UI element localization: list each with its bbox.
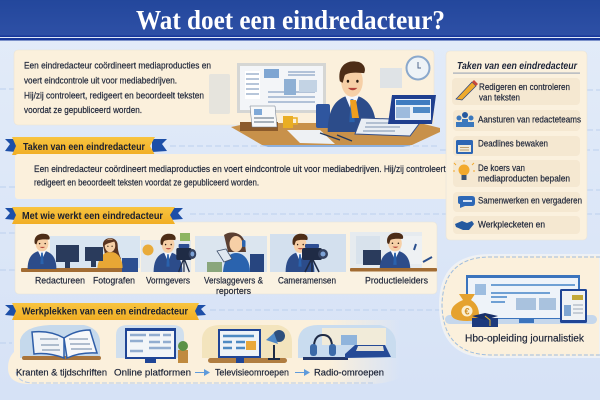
person xyxy=(316,104,330,128)
panel: intro xyxy=(14,50,434,125)
role: cameramensen xyxy=(278,234,336,286)
task: aansturen: Aansturen van redacteteams xyxy=(478,114,581,126)
desk xyxy=(231,123,440,145)
panel: met wie xyxy=(15,222,437,297)
panel: taken text xyxy=(15,154,455,199)
task: koers: De koers van xyxy=(478,163,525,174)
illustration backgrounds xyxy=(50,232,422,272)
workplace: kranten en tijdschriften xyxy=(16,325,107,378)
title: Wat doet een eindredacteur? xyxy=(136,4,445,35)
heading banner: Taken xyxy=(5,137,167,155)
arrow xyxy=(295,369,310,376)
role: cameramensen: Cameramensen xyxy=(278,276,336,286)
heading banner: met wie xyxy=(5,207,183,224)
workplace: radio-omroepen: Radio-omroepen xyxy=(314,368,384,378)
role: vormgevers xyxy=(142,233,196,286)
arrow xyxy=(195,369,210,376)
panel: taken sidebar xyxy=(446,51,587,240)
workplace: kranten en tijdschriften: Kranten & tijdschriften xyxy=(16,368,107,378)
task: samenwerken: Samenwerken en vergaderen xyxy=(478,196,582,206)
desk 1 xyxy=(21,268,128,272)
illustration: editor at desk xyxy=(209,56,440,147)
task: redigeren: van teksten xyxy=(479,92,520,104)
role: fotografen xyxy=(85,238,138,286)
icon: graduation cap xyxy=(472,313,498,327)
role: vormgevers: Vormgevers xyxy=(146,276,190,286)
task: samenwerken xyxy=(453,192,582,212)
role: verslaggevers en reporters: Verslaggevers & xyxy=(204,276,264,286)
workplace: radio-omroepen xyxy=(298,325,396,378)
task: koers: mediaproducten bepalen xyxy=(478,174,570,184)
sidebar heading: Taken van een eindredacteur xyxy=(457,61,578,72)
label: Hbo-opleiding journalistiek xyxy=(465,334,585,344)
task: werkplekken xyxy=(453,216,580,234)
heading banner: Taken: Taken van een eindredacteur xyxy=(23,141,145,153)
role: productieleiders: Productieleiders xyxy=(365,276,428,286)
heading banner: met wie: Met wie werkt een eindredacteur xyxy=(22,210,163,222)
panel: taken text: Een eindredacteur coördineert mediaproducties en voert eindcontrole uit voor mediabedrijven. Hij/zij controleert, xyxy=(34,164,448,175)
role: fotografen: Fotografen xyxy=(93,276,135,286)
heading banner: werkplekken xyxy=(5,303,206,320)
intro text: voert eindcontrole uit voor mediabedrijven. xyxy=(24,76,177,86)
heading banner: werkplekken: Werkplekken van een en eindredacteur xyxy=(22,306,188,318)
workplace: televisieomroepen xyxy=(202,325,292,378)
intro text: Een eindredacteur coördineert mediaproducties en xyxy=(24,60,211,72)
panel: taken text: redigeert en beoordeelt teksten voordat ze gepubliceerd worden. xyxy=(34,178,259,188)
title banner xyxy=(0,0,600,40)
intro text: voordat ze gepubliceerd worden. xyxy=(24,105,142,116)
intro text xyxy=(24,60,211,116)
task: deadlines xyxy=(453,136,580,156)
task: redigeren: Redigeren en controleren xyxy=(479,82,570,93)
role: productieleiders xyxy=(350,233,437,286)
role: redacteuren xyxy=(28,234,85,286)
task: deadlines: Deadlines bewaken xyxy=(478,138,548,150)
task: werkplekken: Werkplecketen en xyxy=(478,220,545,230)
panel: hbo opleiding xyxy=(440,255,600,357)
panel: werkplekken xyxy=(8,320,400,384)
intro text: Hij/zij controleert, redigeert en beoordeelt teksten xyxy=(24,90,204,102)
workplace: online platformen: Online platformen xyxy=(114,368,191,378)
task: koers xyxy=(453,160,580,187)
role: verslaggevers en reporters: reporters xyxy=(216,286,251,297)
workplace: televisieomroepen: Televisieomroepen xyxy=(215,368,289,378)
role: verslaggevers en reporters xyxy=(204,232,264,297)
icon: money bag xyxy=(451,294,479,321)
icon: website on monitor xyxy=(445,275,597,324)
workplace: online platformen xyxy=(114,325,191,378)
role: redacteuren: Redactureen xyxy=(35,276,85,286)
task: redigeren xyxy=(452,78,580,105)
icon: money bag: € xyxy=(464,306,470,316)
task: aansturen xyxy=(453,110,581,131)
